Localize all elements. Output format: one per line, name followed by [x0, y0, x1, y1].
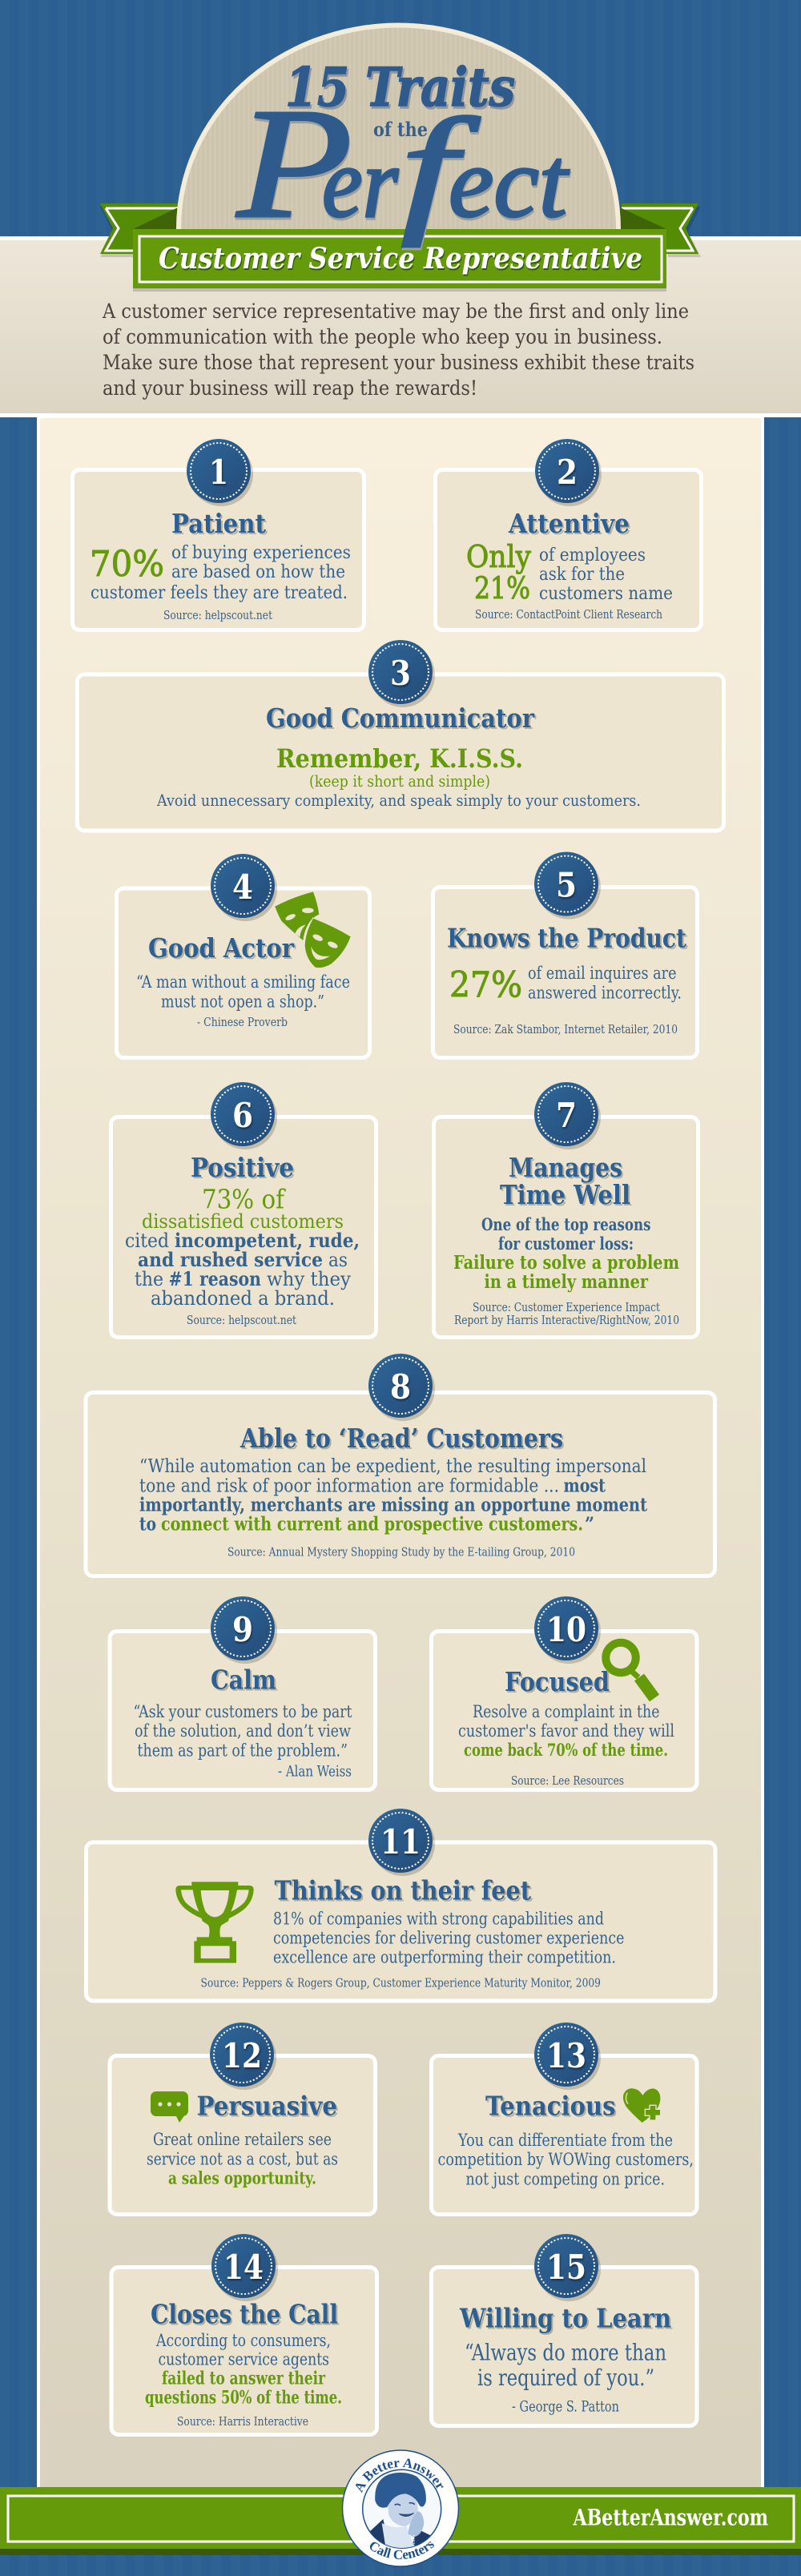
badge 5: 5 — [556, 865, 577, 905]
badge 1 — [187, 439, 253, 506]
text: as — [328, 1249, 348, 1271]
badge 6 — [211, 1082, 277, 1149]
callout: Failure to solve a problem — [453, 1252, 679, 1274]
intro paragraph: and your business will reap the rewards! — [103, 376, 477, 400]
badge 7: 7 — [556, 1096, 577, 1135]
icon: theatre masks — [275, 892, 351, 968]
panel: trait 14 Closes the Call — [111, 2234, 376, 2435]
text — [125, 1229, 360, 1310]
callout — [145, 2368, 342, 2408]
heading — [500, 1152, 630, 1210]
text: incompetent, rude, — [175, 1229, 360, 1252]
source: Source: Lee Resources — [511, 1773, 624, 1788]
title: 15 Traits: 15 Traits — [285, 56, 515, 119]
text: competition by WOWing customers, — [437, 2150, 694, 2169]
text: According to consumers, — [155, 2331, 331, 2350]
badge 11 — [368, 1809, 435, 1876]
heading: Patient: Patient — [171, 508, 267, 539]
badge 11: 11 — [380, 1822, 421, 1862]
attribution: - Chinese Proverb — [197, 1015, 288, 1029]
header emblem — [100, 23, 701, 292]
stat: Only 21%: Only — [466, 539, 531, 574]
heading: Thinks on their feet — [274, 1874, 532, 1906]
badge 3 — [368, 640, 435, 707]
panel: trait 2 Attentive — [436, 439, 702, 630]
text: and rushed service — [138, 1248, 323, 1271]
text — [481, 1214, 650, 1254]
callout: questions 50% of the time. — [145, 2387, 342, 2408]
badge 14 — [211, 2234, 278, 2301]
text — [155, 2331, 331, 2369]
text: for customer loss: — [498, 1234, 634, 1254]
source: Source: Customer Experience Impact — [473, 1300, 660, 1314]
subtext: (keep it short and simple) — [309, 771, 490, 791]
attribution: - George S. Patton — [512, 2398, 619, 2416]
source: Source: Harris Interactive — [177, 2414, 308, 2429]
badge 10 — [534, 1596, 601, 1664]
panel: trait 8 Able to Read Customers — [86, 1354, 714, 1576]
quote: “A man without a smiling face — [136, 972, 350, 992]
icon: speech bubble — [151, 2091, 188, 2123]
ribbon front — [133, 229, 666, 292]
heading: Knows the Product — [447, 923, 687, 953]
text: customer service agents — [159, 2350, 329, 2369]
panel: trait 6 Positive — [111, 1082, 376, 1338]
callout — [453, 1252, 679, 1293]
ribbon tails — [100, 203, 701, 257]
quote — [139, 1456, 647, 1535]
quote: most — [564, 1475, 606, 1496]
badge 4 — [211, 854, 277, 921]
quote: connect with current and prospective customers. — [161, 1514, 583, 1535]
text: are based on how the — [171, 562, 345, 582]
stat: Only 21% — [466, 539, 531, 606]
quote: tone and risk of poor information are formidable ... — [139, 1475, 559, 1496]
badge 2: 2 — [557, 453, 578, 492]
subtitle: Customer Service Representative: Customer Service Representative — [159, 242, 642, 276]
stat 73% — [142, 1184, 344, 1233]
quote: them as part of the problem.” — [138, 1741, 348, 1761]
text — [273, 1910, 625, 1967]
badge 3: 3 — [390, 654, 411, 693]
callout: come back 70% of the time. — [464, 1740, 668, 1760]
quote — [136, 972, 350, 1011]
stat 27%: 27% — [449, 964, 522, 1006]
main content panel — [37, 417, 764, 2501]
text — [147, 2130, 338, 2169]
badge 15: 15 — [546, 2248, 586, 2287]
title: Perfect: f — [400, 89, 480, 248]
text: ask for the — [539, 565, 625, 585]
text: abandoned a brand. — [151, 1287, 335, 1310]
panel: trait 9 Calm — [110, 1596, 375, 1789]
heading: Good Actor — [148, 932, 295, 964]
text: competencies for delivering customer experience — [273, 1929, 625, 1948]
badge 12 — [210, 2023, 276, 2090]
badge 9: 9 — [232, 1610, 253, 1649]
source: Report by Harris Interactive/RightNow, 2010 — [454, 1313, 679, 1327]
heading: Closes the Call — [151, 2299, 338, 2329]
quote: “While automation can be expedient, the resulting impersonal — [139, 1456, 646, 1477]
heading: Tenacious — [485, 2091, 615, 2121]
text — [458, 1702, 674, 1741]
stat: Only 21%: 21% — [474, 571, 530, 606]
badge 7 — [534, 1082, 601, 1149]
source: Source: Annual Mystery Shopping Study by the E-tailing Group, 2010 — [227, 1544, 575, 1559]
panel: trait 15 Willing to Learn — [431, 2234, 697, 2425]
badge 10: 10 — [546, 1610, 586, 1649]
quote — [133, 1702, 352, 1761]
quote: must not open a shop.” — [161, 992, 324, 1011]
source: Source: ContactPoint Client Research — [475, 607, 662, 622]
text: why they — [267, 1268, 351, 1290]
quote: of the solution, and don’t view — [135, 1721, 351, 1741]
attribution: - Alan Weiss — [278, 1762, 352, 1780]
quote: importantly, merchants are missing an opportune moment — [139, 1495, 647, 1515]
badge 13 — [534, 2023, 601, 2090]
text: #1 reason — [168, 1267, 261, 1290]
callout: a sales opportunity. — [168, 2167, 316, 2188]
badge 15 — [534, 2234, 601, 2301]
icon: heart with plus — [623, 2088, 660, 2123]
text: customer feels they are treated. — [91, 583, 348, 603]
text: of employees — [539, 545, 646, 566]
quote: is required of you.” — [477, 2365, 654, 2391]
text: Resolve a complaint in the — [473, 1702, 660, 1721]
title: Perfect: P — [235, 75, 352, 251]
stat 73%: dissatisfied customers — [142, 1210, 344, 1233]
text: Avoid unnecessary complexity, and speak simply to your customers. — [156, 791, 641, 810]
intro paragraph: A customer service representative may be the first and only line — [102, 300, 689, 323]
source: Source: Peppers & Rogers Group, Customer Experience Maturity Monitor, 2009 — [200, 1975, 601, 1990]
icon: trophy — [175, 1882, 254, 1963]
text: One of the top reasons — [481, 1214, 650, 1234]
text: answered incorrectly. — [528, 984, 682, 1003]
text: the — [135, 1268, 163, 1290]
source — [454, 1300, 679, 1327]
callout: failed to answer their — [162, 2368, 325, 2389]
panel: trait 10 Focused — [431, 1596, 697, 1789]
text: of email inquires are — [528, 964, 676, 983]
panel: trait 11 Thinks on their feet — [87, 1809, 715, 2001]
callout: in a timely manner — [484, 1271, 649, 1293]
intro paragraph — [102, 300, 694, 400]
quote: “Always do more than — [465, 2339, 666, 2366]
panel: trait 4 Good Actor — [117, 854, 370, 1057]
panel: trait 3 Good Communicator — [77, 640, 724, 831]
text: of buying experiences — [171, 543, 351, 563]
intro band — [0, 236, 801, 417]
quote: “Ask your customers to be part — [133, 1702, 352, 1721]
text: service not as a cost, but as — [147, 2150, 338, 2169]
title: Perfect: ect — [449, 128, 570, 239]
quote — [465, 2339, 666, 2391]
intro paragraph: of communication with the people who keep you in business. — [103, 325, 662, 348]
icon: magnifying glass — [606, 1643, 654, 1698]
text: 81% of companies with strong capabilities and — [273, 1910, 604, 1929]
badge 9 — [211, 1596, 277, 1664]
text — [91, 543, 351, 603]
badge 13: 13 — [546, 2036, 586, 2075]
text: Great online retailers see — [153, 2130, 332, 2149]
source: Source: Zak Stambor, Internet Retailer, 2010 — [453, 1022, 678, 1036]
text: not just competing on price. — [466, 2169, 665, 2188]
logo text top: A Better Answer — [356, 2458, 444, 2493]
source: Source: helpscout.net — [163, 608, 272, 622]
badge 14: 14 — [223, 2248, 264, 2287]
text — [539, 545, 673, 604]
heading: Positive — [191, 1152, 294, 1183]
badge 5 — [534, 852, 601, 920]
badge 12: 12 — [222, 2036, 262, 2075]
text — [437, 2131, 694, 2188]
text — [528, 964, 682, 1003]
heading: Attentive: Attentive — [508, 508, 630, 539]
callout: Remember KISS: Remember, K.I.S.S. — [276, 743, 523, 774]
badge 2 — [535, 439, 602, 506]
text: customer's favor and they will — [458, 1721, 674, 1741]
stat 73%: 73% of — [202, 1184, 286, 1214]
badge 6: 6 — [232, 1096, 253, 1135]
text: excellence are outperforming their competition. — [273, 1948, 616, 1967]
logo: A Better Answer Call Centers — [341, 2449, 460, 2567]
panel: trait 12 Persuasive — [110, 2023, 375, 2214]
title: of the: of the — [373, 118, 428, 141]
stat 70%: 70% — [90, 544, 164, 585]
text: customers name — [539, 584, 673, 604]
panel: trait 7 Manages Time Well — [434, 1082, 698, 1338]
footer band — [0, 2487, 801, 2576]
logo photo — [370, 2472, 431, 2548]
badge 1: 1 — [209, 453, 228, 492]
quote: to — [139, 1514, 156, 1535]
heading: Willing to Learn — [459, 2302, 671, 2334]
title: Perfect: er — [322, 128, 399, 239]
panel: trait 5 Knows the Product — [433, 852, 697, 1057]
heading: Calm — [211, 1664, 276, 1695]
badge 4: 4 — [232, 867, 253, 907]
heading: Persuasive — [197, 2091, 337, 2121]
badge 8: 8 — [390, 1367, 411, 1407]
heading: Focused — [505, 1666, 610, 1697]
heading: Able to ‘Read’ Customers — [239, 1423, 563, 1454]
intro paragraph: Make sure those that represent your business exhibit these traits — [103, 351, 694, 374]
quote: ” — [585, 1514, 594, 1535]
text: cited — [125, 1230, 169, 1252]
heading: Manages — [509, 1152, 622, 1183]
source: Source: helpscout.net — [187, 1313, 296, 1327]
heading: Good Communicator — [266, 702, 535, 734]
logo text bottom: Call Centers — [370, 2541, 434, 2560]
badge 8 — [368, 1354, 435, 1421]
panel: trait 1 Patient — [72, 439, 364, 630]
oval emblem — [176, 23, 621, 237]
panel: trait 13 Tenacious — [431, 2023, 697, 2214]
heading: Time Well — [500, 1179, 630, 1210]
text: You can differentiate from the — [457, 2131, 673, 2150]
